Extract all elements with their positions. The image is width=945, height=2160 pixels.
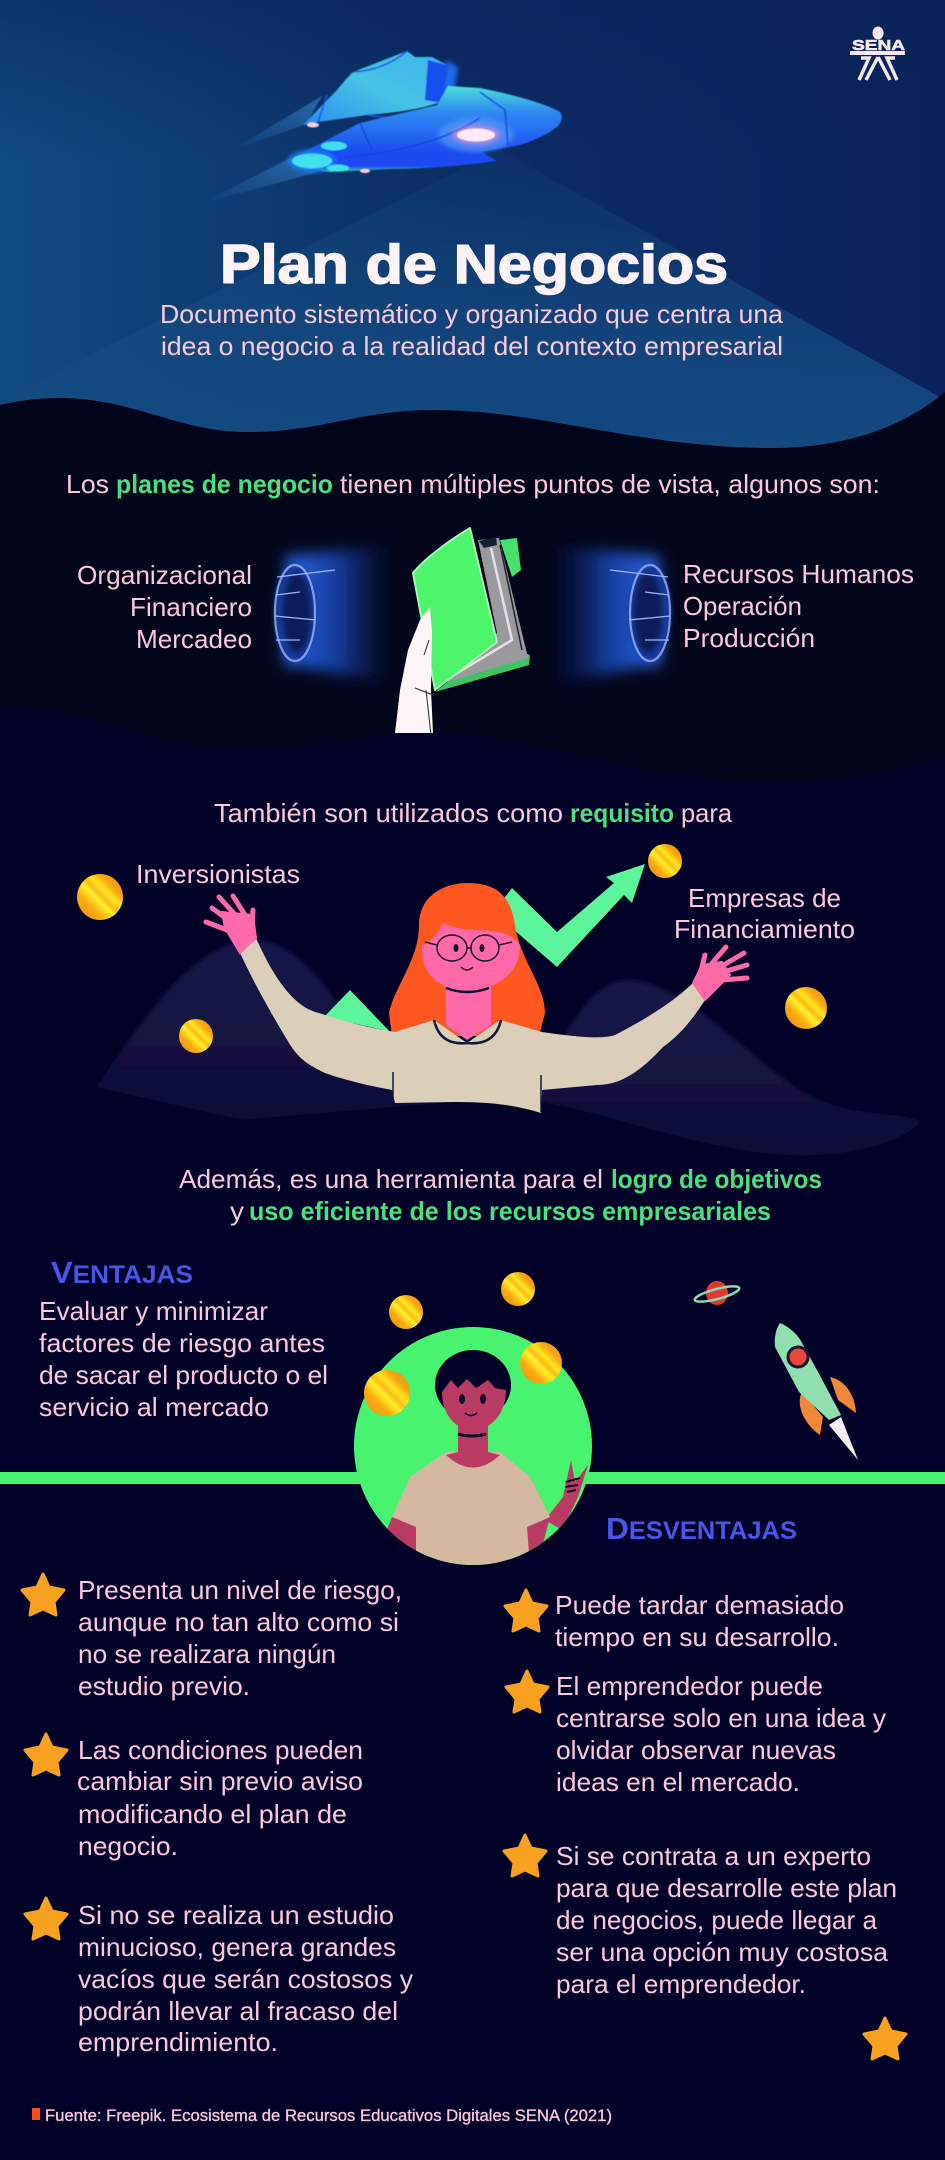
right list item 3: Si se contrata a un experto [556,1841,871,1871]
shirt [392,1452,550,1566]
objectives text: logro de objetivos [611,1164,822,1194]
left list item 2: cambiar sin previo aviso [77,1766,363,1796]
rocket [775,1323,858,1460]
right list item 2: El emprendedor puede [556,1671,823,1701]
hair [389,883,545,1036]
left list item 2: negocio. [78,1831,178,1861]
left list item 1: aunque no tan alto como si [78,1607,399,1637]
objectives text: uso eficiente de los recursos empresariales [249,1196,771,1226]
subtitle: Documento sistemático y organizado que centra una [160,299,784,329]
list: left viewpoints: Financiero [130,592,252,622]
green divider [0,1472,945,1484]
right list item 2: centrarse solo en una idea y [556,1703,886,1733]
front ship [288,86,562,173]
right list item 3: para que desarrolle este plan [556,1873,897,1903]
subtitle: idea o negocio a la realidad del contexto empresarial [161,331,783,361]
ventajas text: Evaluar y minimizar [39,1296,268,1326]
top darkening [0,0,945,460]
right list item 1 [555,1590,844,1652]
label: Empresas de Financiamiento: Empresas de [688,883,841,913]
left list item 3: minucioso, genera grandes [78,1932,396,1962]
neck [446,1425,500,1468]
folder tab [500,538,521,577]
eyes and mouth [454,944,484,970]
ship trails [200,96,322,204]
spaceship illustration [200,51,562,204]
collar [434,1020,501,1043]
arms [388,1460,588,1552]
neck [446,975,491,1040]
right list item 2: ideas en el mercado. [556,1767,800,1797]
coins around the person [364,1272,562,1416]
heading: Ventajas: VENTAJAS [51,1255,193,1290]
ventajas text [39,1296,328,1422]
left list item 3: vacíos que serán costosos y [78,1964,413,1994]
glasses [425,935,512,961]
points of view heading [66,469,880,499]
green growth arrow [324,864,645,1036]
left list item 2: Las condiciones pueden [78,1735,363,1765]
mountains background [96,940,922,1156]
face [442,1379,506,1430]
left list item 1 [78,1575,402,1701]
portal left [274,545,395,684]
green circle [354,1327,592,1565]
face [422,923,520,990]
subtitle [160,299,784,361]
right list item 1: Puede tardar demasiado [555,1590,844,1620]
rear ship [303,51,458,128]
folder held by hand [395,528,530,735]
label: Inversionistas: Inversionistas [136,859,300,889]
objectives text [179,1164,822,1226]
left hand [206,896,256,953]
ventajas text: servicio al mercado [39,1392,269,1422]
left list item 3 [78,1900,413,2057]
list: left viewpoints [77,560,252,654]
hair [435,1350,511,1409]
fingers detail [565,1478,580,1492]
ventajas text: de sacar el producto o el [39,1360,328,1390]
list: right viewpoints: Producción [683,623,815,653]
list: left viewpoints: Organizacional [77,560,252,590]
requirement heading [214,798,733,828]
pages [443,538,528,683]
points of view heading: tienen múltiples puntos de vista, algunos son: [340,469,880,499]
background: sky [0,0,945,460]
right list item 3: ser una opción muy costosa [556,1937,889,1967]
hand [395,607,433,733]
coins around the woman [77,844,827,1053]
left list item 1: Presenta un nivel de riesgo, [78,1575,402,1605]
heading: Desventajas: DESVENTAJAS [606,1511,797,1546]
title: Plan de Negocios [220,233,728,295]
points of view heading: Los [66,469,109,499]
left list item 3: podrán llevar al fracaso del [78,1996,398,2026]
second wave section [0,706,945,2160]
front cover [413,528,497,690]
SENA logo [850,26,905,80]
light beam under the ship [0,150,945,460]
right hand [693,947,747,1000]
facial features [458,1394,486,1436]
ventajas text: factores de riesgo antes [39,1328,325,1358]
list: right viewpoints: Recursos Humanos [683,559,914,589]
back cover [435,642,530,692]
sweater [240,938,705,1113]
list: left viewpoints: Mercadeo [136,624,252,654]
left list item 2: modificando el plan de [78,1799,347,1829]
star bullets [22,1574,906,2059]
label: Empresas de Financiamiento [674,883,855,944]
right list item 1: tiempo en su desarrollo. [555,1622,839,1652]
objectives text: Además, es una herramienta para el [179,1164,603,1194]
list: right viewpoints [683,559,914,653]
right list item 3: de negocios, puede llegar a [556,1905,878,1935]
right list item 2: olvidar observar nuevas [556,1735,836,1765]
requirement heading: para [681,798,733,828]
left list item 1: no se realizara ningún [78,1639,336,1669]
requirement heading: requisito [570,798,674,828]
portal right [550,545,671,684]
left list item 1: estudio previo. [78,1671,250,1701]
right list item 3: para el emprendedor. [556,1969,806,1999]
label: Empresas de Financiamiento: Financiamiento [674,914,855,944]
source footer: Fuente: Freepik. Ecosistema de Recursos Educativos Digitales SENA (2021) [45,2106,612,2125]
planet [693,1281,741,1305]
woman illustration [206,883,747,1113]
chin line [446,988,489,992]
list: right viewpoints: Operación [683,591,802,621]
sweater seams [393,1072,541,1112]
objectives text: y [230,1196,244,1226]
left list item 2 [77,1735,363,1861]
left list item 3: emprendimiento. [78,2027,278,2057]
left list item 3: Si no se realiza un estudio [78,1900,394,1930]
person in green circle [354,1327,592,1566]
right list item 3 [556,1841,897,1999]
SENA logo: SENA [852,37,905,54]
points of view heading: planes de negocio [116,469,333,499]
requirement heading: También son utilizados como [214,798,563,828]
right list item 2 [556,1671,886,1797]
